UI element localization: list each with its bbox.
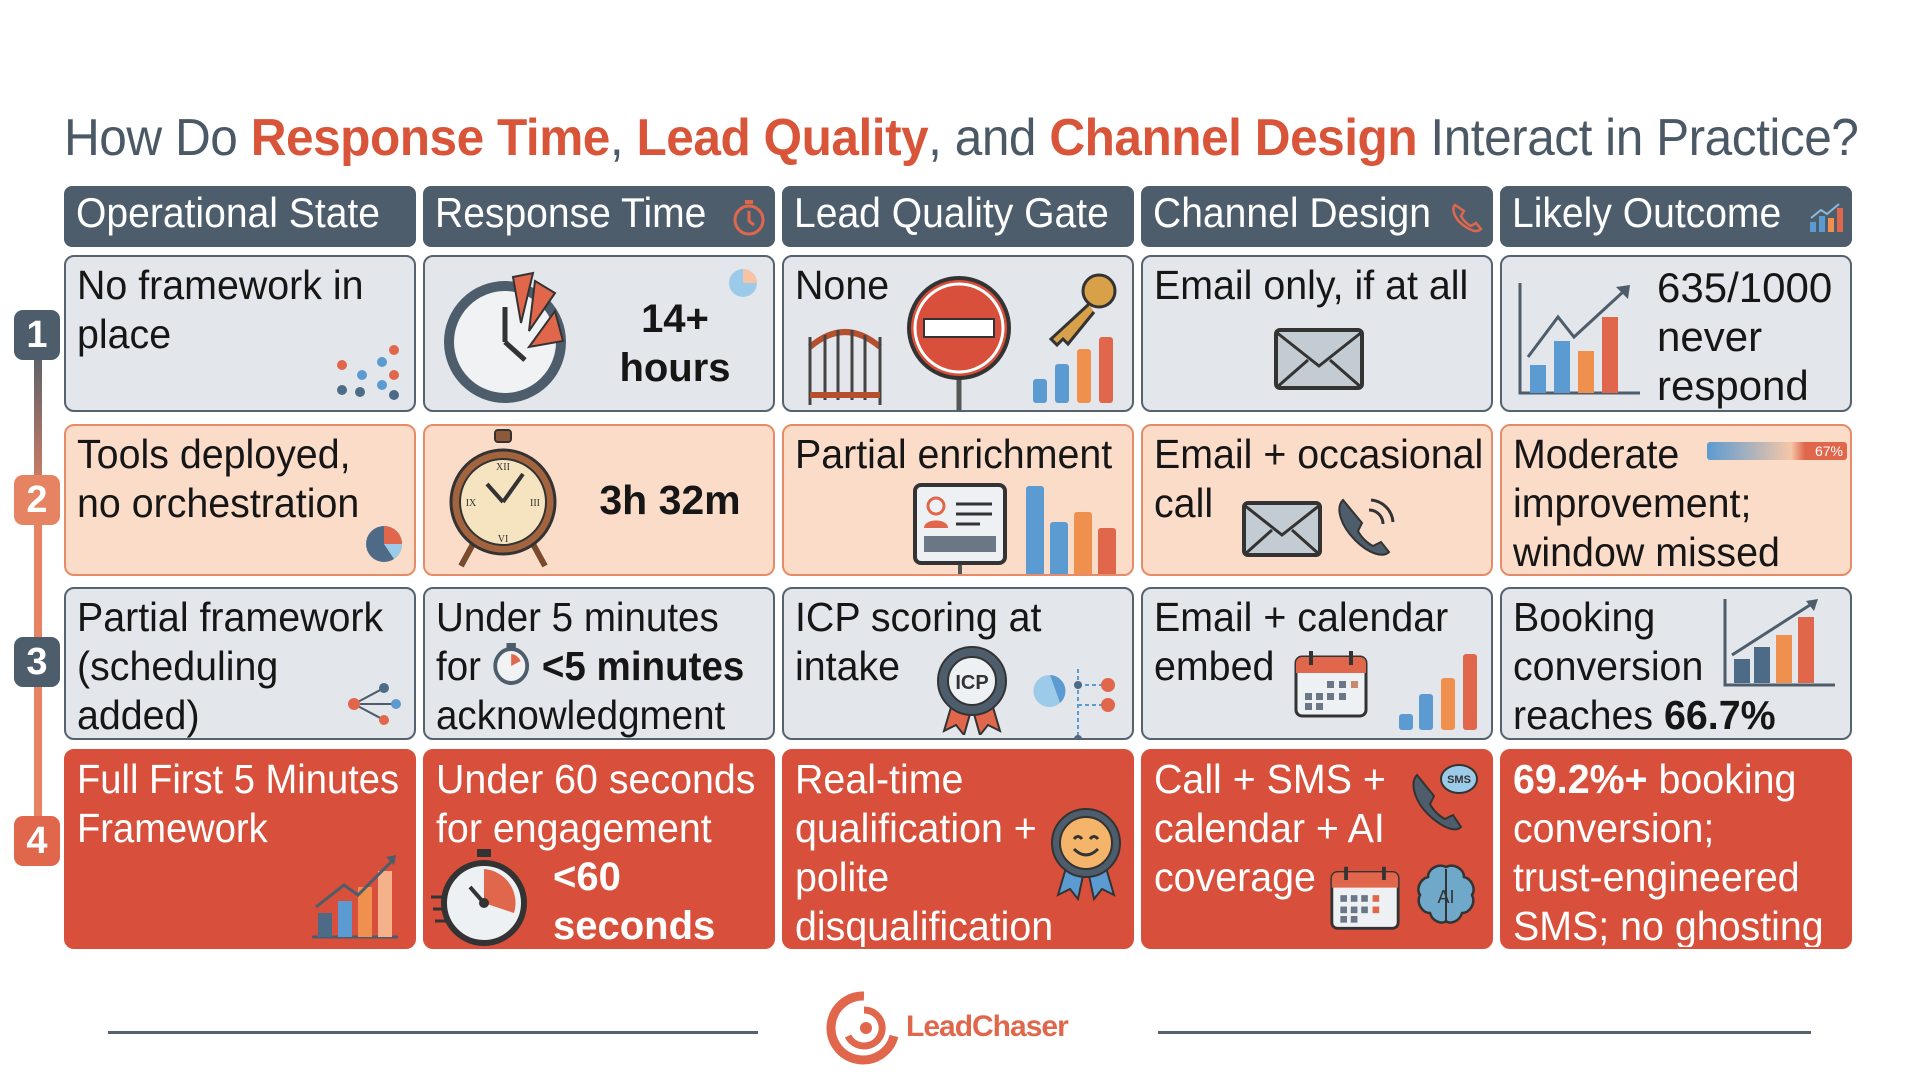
header: channel design: Channel Design <box>1153 189 1431 236</box>
cell: email + occasional call <box>1141 424 1493 576</box>
icon: progress bar: 67% <box>1815 443 1843 459</box>
badge 2 <box>14 475 60 525</box>
icon: dots <box>337 345 399 400</box>
cell: ICP scoring: intake <box>795 643 900 689</box>
cell: tools deployed: Tools deployed, <box>77 431 351 477</box>
cell: 69.2% outcome: trust-engineered <box>1513 854 1800 900</box>
cell: call sms calendar ai: coverage <box>1154 854 1316 900</box>
cell: under 60 seconds: for engagement <box>436 805 712 851</box>
footer line right <box>1158 1031 1811 1034</box>
icon: ICP badge <box>937 646 1007 735</box>
cell: email only <box>1141 255 1493 412</box>
icon: growth chart <box>312 855 398 938</box>
cell: none: None <box>795 262 889 308</box>
cell: ICP scoring <box>782 587 1134 740</box>
icon: AI brain <box>1417 864 1475 924</box>
header: likely outcome: Likely Outcome <box>1512 189 1781 236</box>
cell: booking conversion: Booking <box>1513 594 1655 640</box>
footer line left <box>108 1031 758 1034</box>
cell: under 5 minutes: Under 5 minutes <box>436 594 719 640</box>
timeline line lower <box>34 505 42 845</box>
timeline line <box>34 340 42 510</box>
header: lead quality gate: Lead Quality Gate <box>794 189 1109 236</box>
text <box>553 855 715 948</box>
icon: progress bar <box>1707 442 1847 460</box>
cell: tools deployed: no orchestration <box>77 480 359 526</box>
icon: broken clock <box>444 272 566 403</box>
cell: moderate improvement <box>1500 424 1852 576</box>
text: never <box>1657 313 1762 360</box>
cell: no framework: place <box>77 311 171 357</box>
cell: 69.2% outcome: 69.2%+ booking <box>1513 756 1796 802</box>
icon: ICP badge: ICP <box>955 672 989 694</box>
icon: logo mark <box>826 992 898 1064</box>
cell: none <box>782 255 1134 412</box>
icon: calendar <box>1294 651 1368 718</box>
cell: under 5 minutes: for <5 minutes <box>436 643 744 689</box>
header: likely outcome <box>1500 186 1852 247</box>
header: response time <box>423 186 775 247</box>
icon: smiley badge <box>1051 808 1121 901</box>
text: hours <box>619 346 731 390</box>
icon: bars <box>1026 486 1116 574</box>
cell: 69.2% outcome: SMS; no ghosting <box>1513 903 1824 949</box>
cell: ICP scoring: ICP scoring at <box>795 594 1041 640</box>
header: operational state <box>64 186 416 247</box>
cell: email + occasional call: Email + occasional <box>1154 431 1483 477</box>
cell: partial enrichment: Partial enrichment <box>795 431 1112 477</box>
cell: no framework <box>64 255 416 412</box>
icon: id card <box>913 483 1007 574</box>
badge 4: 4 <box>26 820 48 862</box>
cell: partial framework: (scheduling <box>77 643 278 689</box>
cell: under 5 minutes: acknowledgment <box>436 692 725 738</box>
text: 635/1000 <box>1657 264 1832 311</box>
cell: real-time qualification: Real-time <box>795 756 963 802</box>
icon: share nodes <box>348 683 401 725</box>
icon: pie <box>366 526 402 562</box>
icon: chart <box>1724 599 1835 686</box>
cell: under 5 minutes <box>423 587 775 740</box>
icon: calendar <box>1330 866 1400 930</box>
cell: 69.2% outcome <box>1500 749 1852 949</box>
icon: chart <box>1518 283 1640 394</box>
header: operational state: Operational State <box>76 189 380 236</box>
cell: 635/1000 <box>1500 255 1852 412</box>
cell: booking conversion: conversion <box>1513 643 1703 689</box>
cell: partial enrichment <box>782 424 1134 576</box>
icon: envelope <box>1274 328 1364 390</box>
icon: stopwatch <box>431 849 527 946</box>
text: 3h 32m <box>599 477 741 523</box>
cell: email + calendar embed: embed <box>1154 643 1274 689</box>
cell: email + calendar embed: Email + calendar <box>1154 594 1448 640</box>
badge 1 <box>14 310 60 360</box>
cell: moderate improvement: improvement; <box>1513 480 1751 526</box>
text <box>1657 264 1832 409</box>
icon: phone sms <box>1412 764 1478 830</box>
icon: bars <box>1399 654 1477 730</box>
icon: AI brain: AI <box>1437 887 1455 907</box>
cell: tools deployed <box>64 424 416 576</box>
cell: under 60 seconds <box>423 749 775 949</box>
cell: partial framework <box>64 587 416 740</box>
text: seconds <box>553 904 715 948</box>
text: respond <box>1657 362 1809 409</box>
header: lead quality gate <box>782 186 1134 247</box>
icon: phone sms: SMS <box>1447 774 1471 786</box>
cell: 3h 32m <box>423 424 775 576</box>
text: 14+ <box>641 297 709 341</box>
cell: email + calendar embed <box>1141 587 1493 740</box>
icon: key and bars <box>1033 274 1116 403</box>
logo <box>826 992 1068 1064</box>
cell: email + occasional call: call <box>1154 480 1213 526</box>
icon: alarm clock: IX <box>466 498 477 509</box>
cell: moderate improvement: Moderate <box>1513 431 1679 477</box>
cell: full framework: Framework <box>77 805 268 851</box>
cell: moderate improvement: window missed <box>1513 529 1780 575</box>
cell: partial framework: Partial framework <box>77 594 383 640</box>
icon: alarm clock: III <box>530 498 540 509</box>
badge 4 <box>14 816 60 866</box>
icon: flow <box>1033 669 1115 738</box>
icon: alarm clock: VI <box>498 534 508 545</box>
header: response time: Response Time <box>435 189 706 236</box>
cell: booking conversion <box>1500 587 1852 740</box>
cell: full framework: Full First 5 Minutes <box>77 756 399 802</box>
text <box>619 297 731 390</box>
icon: no entry <box>907 276 1011 410</box>
icon: alarm clock: XII <box>496 462 510 473</box>
cell: booking conversion: reaches 66.7% <box>1513 692 1776 738</box>
cell: call sms calendar ai: Call + SMS + <box>1154 756 1386 802</box>
cell: real-time qualification <box>782 749 1134 949</box>
icon: envelope <box>1242 501 1322 557</box>
header: channel design <box>1141 186 1493 247</box>
icon: pie <box>729 269 757 297</box>
cell: no framework: No framework in <box>77 262 364 308</box>
cell: real-time qualification: polite <box>795 854 889 900</box>
title: How Do Response Time, Lead Quality, and Channel Design Interact in Practice? <box>64 109 1858 167</box>
cell: real-time qualification: disqualification <box>795 903 1053 949</box>
brand name: LeadChaser <box>906 1010 1068 1043</box>
icon: gate <box>808 328 882 405</box>
badge 3: 3 <box>26 641 48 683</box>
cell: under 60 seconds: Under 60 seconds <box>436 756 755 802</box>
cell: call sms calendar ai <box>1141 749 1493 949</box>
cell: real-time qualification: qualification + <box>795 805 1037 851</box>
icon: phone <box>1338 498 1394 556</box>
cell: email only: Email only, if at all <box>1154 262 1468 308</box>
text: <60 <box>553 855 621 899</box>
badge 2: 2 <box>26 479 48 521</box>
cell: partial framework: added) <box>77 692 200 738</box>
cell: 14+ hours <box>423 255 775 412</box>
cell: 69.2% outcome: conversion; <box>1513 805 1714 851</box>
cell: call sms calendar ai: calendar + AI <box>1154 805 1385 851</box>
icon: alarm clock <box>450 429 556 568</box>
badge 3 <box>14 637 60 687</box>
cell: full framework <box>64 749 416 949</box>
badge 1: 1 <box>26 314 48 356</box>
